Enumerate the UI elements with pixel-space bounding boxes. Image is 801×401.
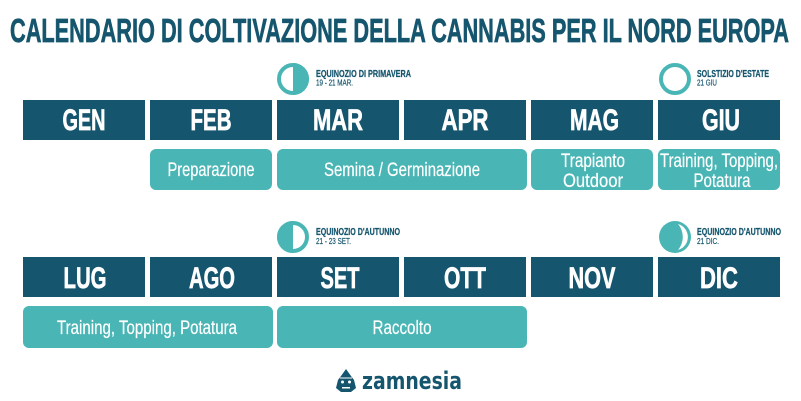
label: december: 21 DIC.	[697, 236, 719, 246]
activity: Raccolto	[277, 306, 527, 348]
activity: Raccolto: Raccolto	[372, 318, 432, 339]
logo: zamnesia: zamnesia	[362, 367, 462, 395]
activity: Semina / Germinazione	[277, 149, 527, 190]
month row 1: MAG	[570, 104, 619, 137]
label: spring equinox	[316, 69, 411, 88]
activity: Preparazione: Preparazione	[168, 160, 254, 181]
logo: zamnesia	[336, 367, 462, 395]
label: autumn equinox: EQUINOZIO D'AUTUNNO	[316, 227, 400, 238]
month row 1: GEN	[62, 104, 106, 137]
month row 2: DIC	[700, 262, 738, 295]
month row 2: AGO	[189, 262, 235, 295]
label: autumn equinox	[316, 227, 400, 246]
label: spring equinox: 19 - 21 MAR.	[316, 78, 353, 88]
label: summer solstice: SOLSTIZIO D'ESTATE	[697, 69, 769, 80]
icon: summer solstice moon	[661, 65, 689, 93]
activity: Semina / Germinazione: Semina / Germinazione	[324, 160, 480, 181]
activity: Preparazione	[150, 149, 272, 190]
month row 2: OTT	[444, 262, 486, 295]
label: december	[697, 227, 781, 246]
month row 1: MAR	[313, 104, 363, 137]
label: spring equinox: EQUINOZIO DI PRIMAVERA	[316, 69, 411, 80]
month row 2: LUG	[64, 262, 106, 295]
month row 2: NOV	[568, 262, 616, 295]
month row 2: SET	[320, 262, 360, 295]
icon: spring equinox moon	[279, 63, 309, 95]
activity: Training, Topping, Potatura	[23, 306, 273, 348]
month row 2	[23, 257, 780, 297]
activity: Training, Topping, Potatura: Potatura	[694, 171, 751, 192]
activity: Trapianto Outdoor: Trapianto	[561, 151, 625, 172]
label: autumn equinox: 21 - 23 SET.	[316, 236, 351, 246]
activity: Trapianto Outdoor: Outdoor	[563, 171, 624, 192]
label: summer solstice: 21 GIU	[697, 78, 717, 88]
label: summer solstice	[697, 69, 769, 88]
month row 1: FEB	[190, 104, 232, 137]
activity: Trapianto Outdoor	[531, 149, 653, 192]
activity: Training, Topping, Potatura	[658, 149, 780, 192]
icon: logo head	[336, 369, 356, 392]
month row 1: GIU	[702, 104, 740, 137]
icon: autumn equinox moon	[277, 221, 307, 253]
activity: Training, Topping, Potatura: Training, Topping, Potatura	[57, 318, 237, 339]
month row 1: APR	[442, 104, 489, 137]
month row 1	[23, 100, 780, 140]
icon: winter moon	[659, 221, 691, 253]
